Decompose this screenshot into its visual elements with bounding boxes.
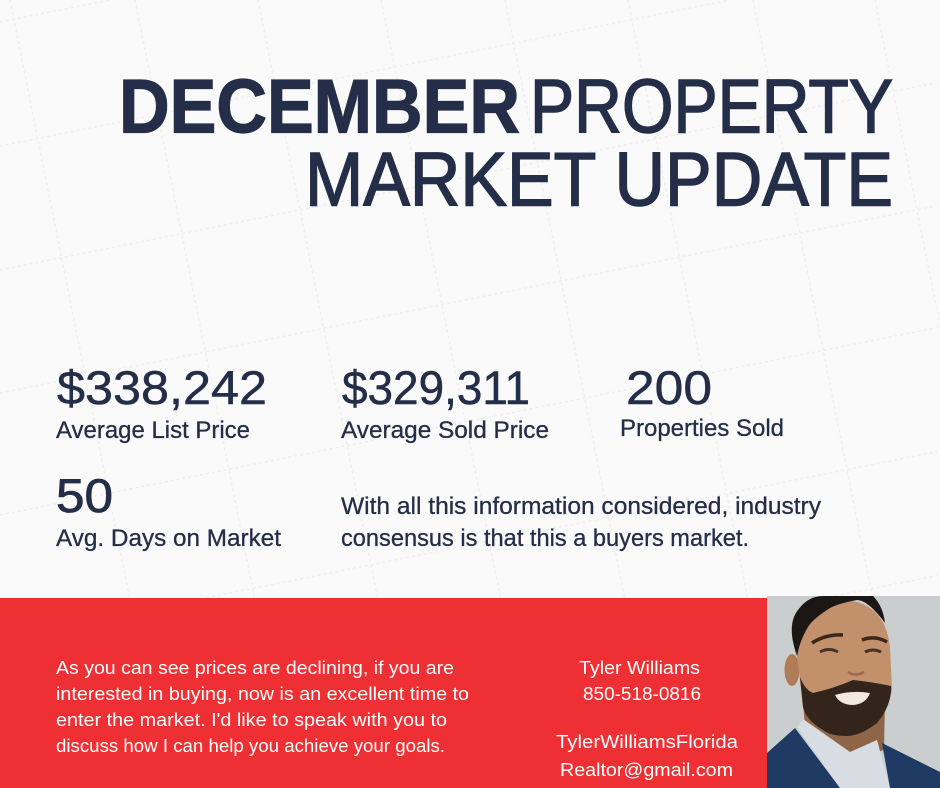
stat: properties sold: 200 <box>626 361 712 414</box>
contact details <box>556 658 739 780</box>
stat: properties sold <box>620 361 784 442</box>
conclusion text <box>341 493 821 552</box>
contact details: Tyler Williams <box>579 658 700 678</box>
call to action text: enter the market. I'd like to speak with you to <box>56 710 447 730</box>
call to action text: As you can see prices are declining, if you are <box>56 658 454 678</box>
contact details: Realtor@gmail.com <box>560 760 733 780</box>
red footer panel <box>0 598 767 788</box>
call to action text <box>56 658 469 756</box>
call to action text: discuss how I can help you achieve your goals. <box>56 736 445 756</box>
conclusion text: With all this information considered, industry <box>341 493 821 520</box>
contact details: TylerWilliamsFlorida <box>556 732 739 752</box>
stat: average sold price: Average Sold Price <box>341 417 549 444</box>
stat: days on market: 50 <box>56 469 113 522</box>
agent portrait illustration <box>767 596 940 788</box>
title: MARKET UPDATE <box>305 138 893 222</box>
stat: average list price: $338,242 <box>57 361 267 414</box>
stat: properties sold: Properties Sold <box>620 415 784 442</box>
stat: average sold price: $329,311 <box>342 361 530 414</box>
call to action text: interested in buying, now is an excellent time to <box>56 684 469 704</box>
title: PROPERTY <box>530 64 893 150</box>
stat: average list price <box>56 361 267 444</box>
title: DECEMBER <box>119 64 520 150</box>
title <box>119 64 893 222</box>
conclusion text: consensus is that this a buyers market. <box>341 525 749 552</box>
stat: average list price: Average List Price <box>56 417 250 444</box>
contact details: 850-518-0816 <box>583 684 701 704</box>
stat: average sold price <box>341 361 549 444</box>
stat: days on market: Avg. Days on Market <box>56 525 281 552</box>
stat: days on market <box>56 469 281 552</box>
